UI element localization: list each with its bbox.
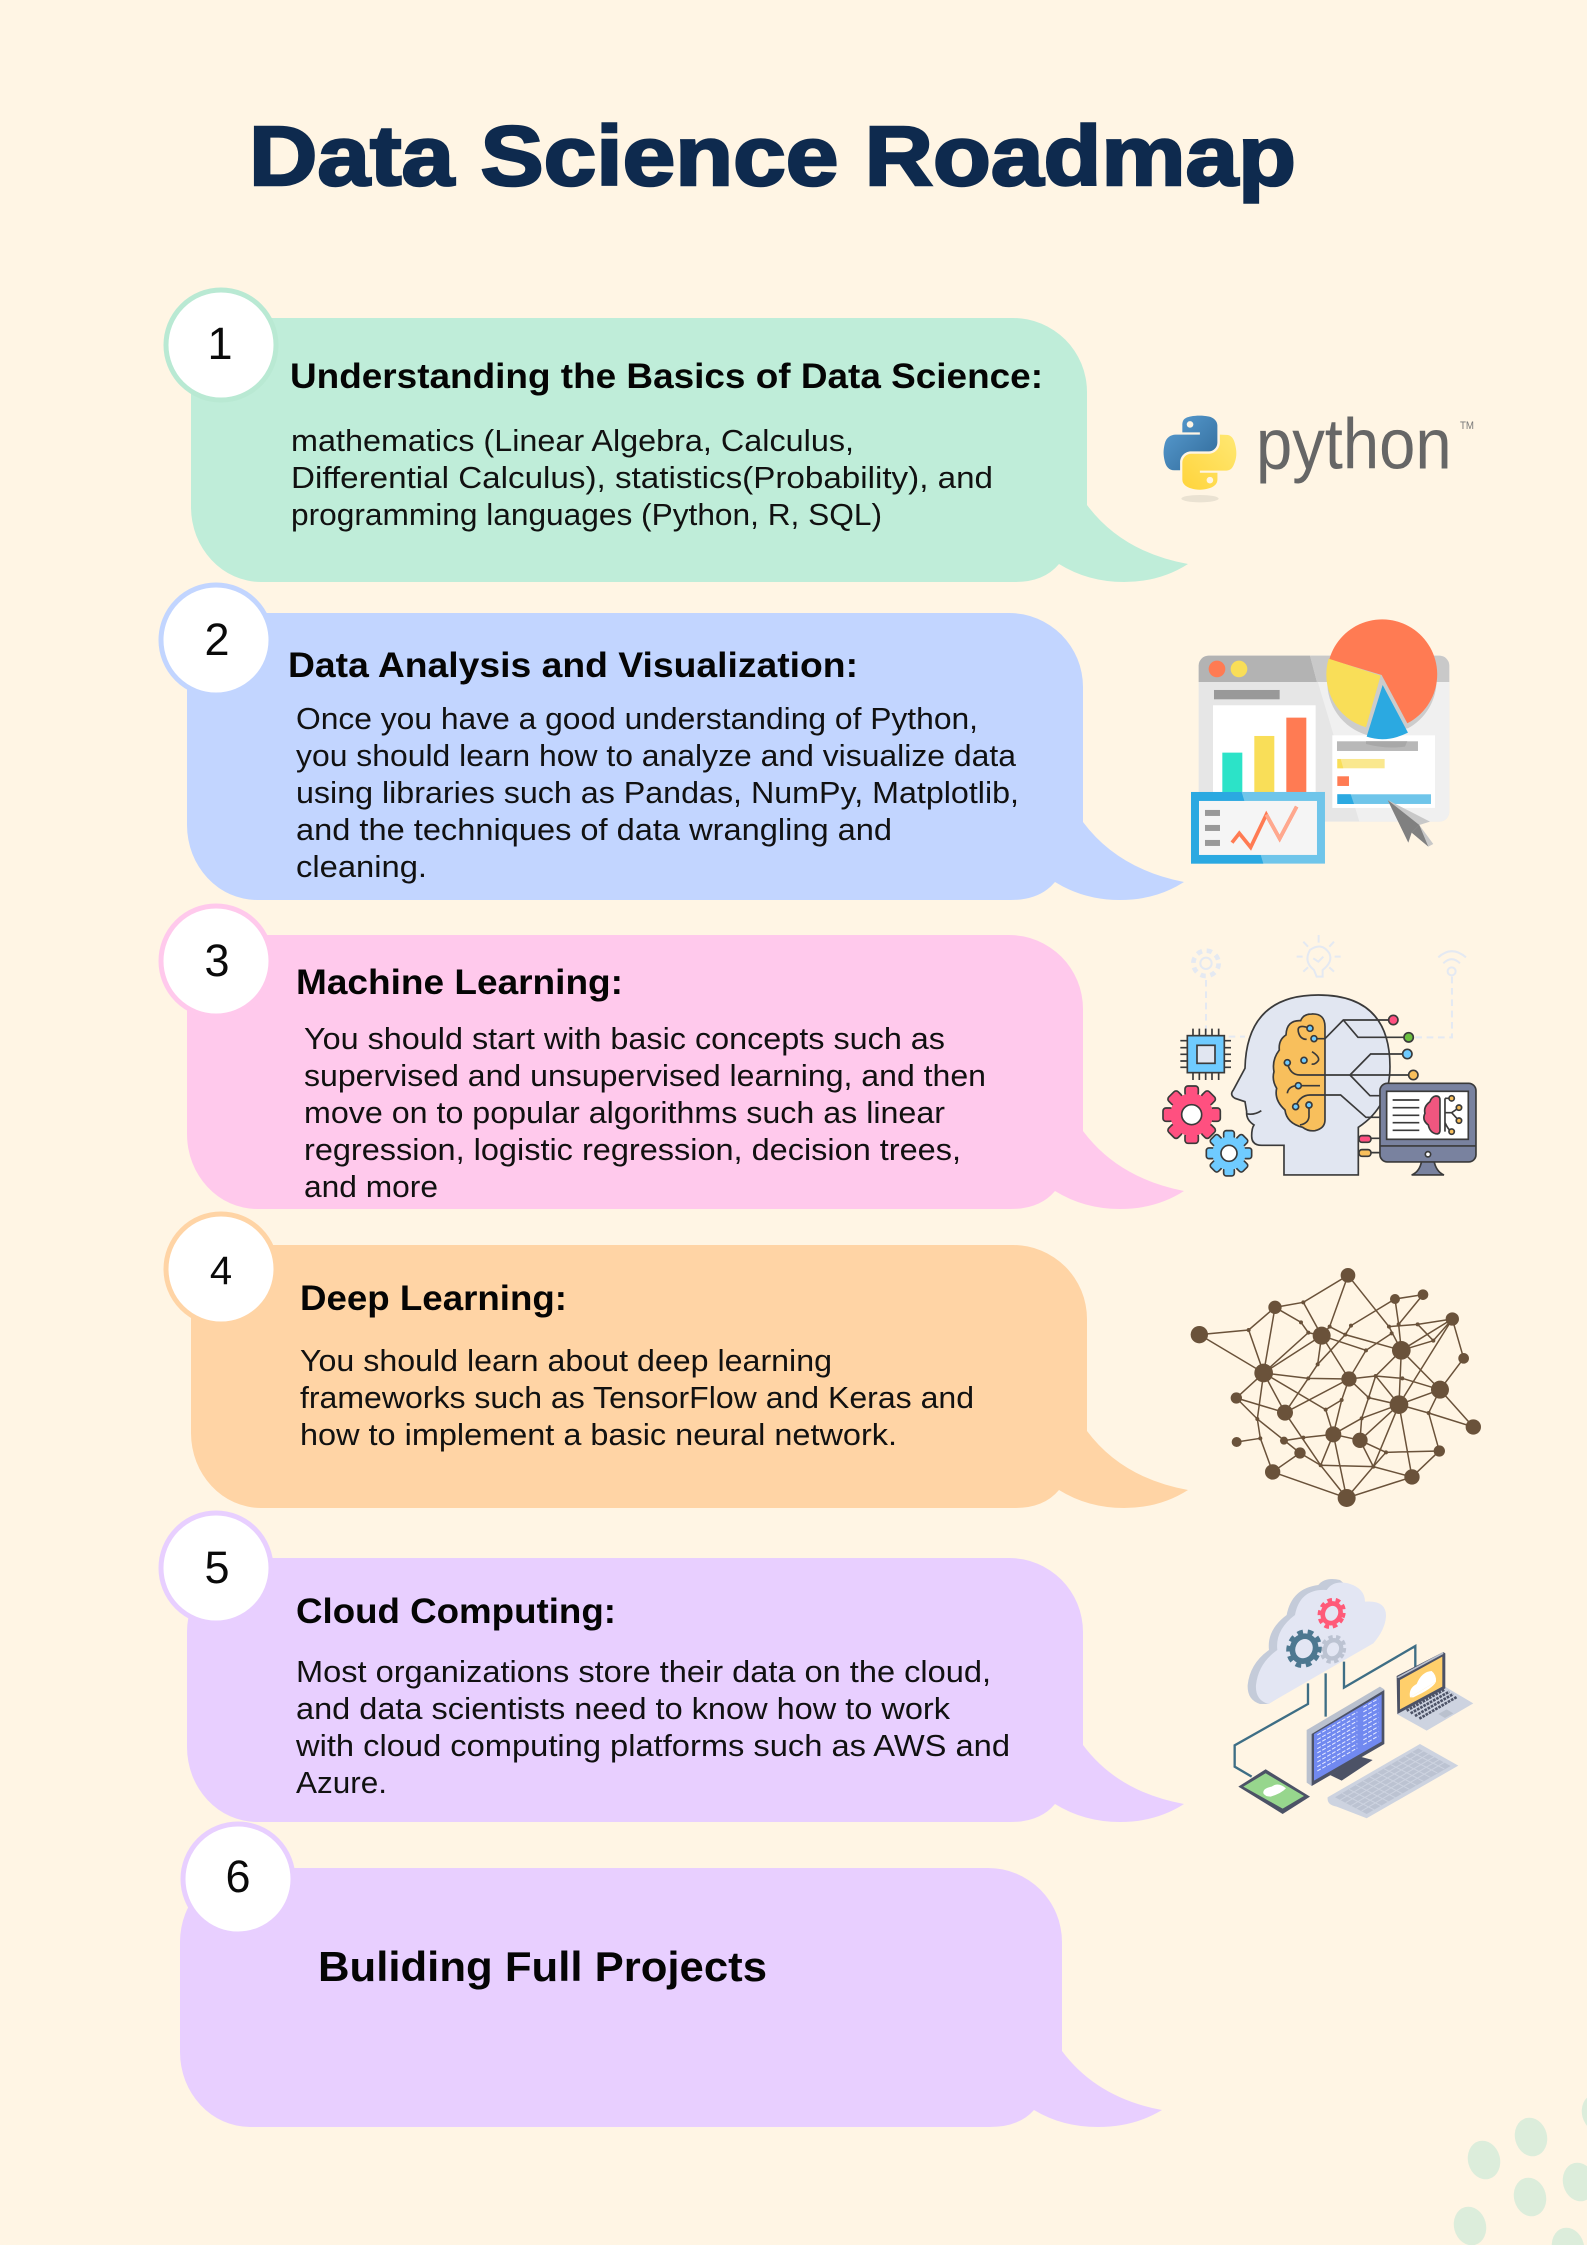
- heading: step 1: Understanding the Basics of Data Science:: [290, 357, 1043, 396]
- desktop monitor: [1307, 1687, 1384, 1786]
- heading: step 3: Machine Learning:: [296, 963, 623, 1002]
- text block: step 1: Differential Calculus), statistics(Probability), and: [291, 460, 993, 495]
- step number 4: 4: [210, 1249, 232, 1293]
- head: [1232, 995, 1390, 1175]
- blue gear: [1206, 1131, 1252, 1176]
- heading: step 5: Cloud Computing:: [296, 1592, 616, 1631]
- icon: python logo: python: [1256, 404, 1452, 484]
- monitor: [1380, 1083, 1476, 1175]
- step number 1: [166, 290, 276, 400]
- text block: step 4: how to implement a basic neural network.: [300, 1417, 897, 1452]
- connection wires: [1235, 1646, 1415, 1777]
- text block: step 4: [300, 1343, 974, 1452]
- text block: step 2: using libraries such as Pandas, NumPy, Matplotlib,: [296, 775, 1019, 810]
- text block: step 2: you should learn how to analyze and visualize data: [296, 738, 1017, 773]
- panel: step 2 data analysis: [161, 585, 1184, 900]
- tablet: [1238, 1769, 1310, 1814]
- chip: [1180, 1029, 1231, 1080]
- icon: data dashboard with charts: [1191, 619, 1449, 864]
- text block: step 3: regression, logistic regression, decision trees,: [304, 1132, 961, 1167]
- icon: python logo: [1164, 404, 1474, 502]
- keyboard: [1328, 1744, 1458, 1818]
- step number 1: 1: [207, 318, 233, 369]
- panel: step 6 full projects: [180, 1824, 1162, 2127]
- text block: step 2: and the techniques of data wrangling and: [296, 812, 892, 847]
- text block: step 5: [295, 1654, 1010, 1800]
- panel: step 4 deep learning: [166, 1214, 1188, 1508]
- cloud: [1248, 1579, 1386, 1704]
- icon: cloud computing devices: [1235, 1579, 1473, 1818]
- text block: step 2: [296, 701, 1019, 884]
- step number 5: [161, 1513, 271, 1623]
- text block: step 2: cleaning.: [296, 849, 427, 884]
- pink gear: [1163, 1086, 1220, 1143]
- step number 6: 6: [225, 1851, 251, 1902]
- panel: step 5 cloud computing: [161, 1513, 1184, 1822]
- step number 6: [183, 1824, 293, 1934]
- icon: neural network graph: [1191, 1268, 1481, 1507]
- icon: brain and machine learning: [1163, 935, 1476, 1176]
- icon: python logo: TM: [1460, 420, 1474, 432]
- step number 2: [161, 585, 271, 695]
- circuit wires: [1287, 1020, 1413, 1153]
- text block: step 3: and more: [304, 1169, 438, 1204]
- panel: step 3 machine learning: [161, 906, 1184, 1209]
- text block: step 2: Once you have a good understanding of Python,: [296, 701, 978, 736]
- faint background symbols: [1193, 935, 1466, 1037]
- step number 3: [161, 906, 271, 1016]
- brain: [1273, 1014, 1325, 1131]
- text block: step 5: and data scientists need to know how to work: [296, 1691, 951, 1726]
- step number 3: 3: [204, 935, 230, 986]
- heading: step 2: Data Analysis and Visualization:: [288, 646, 858, 685]
- text block: step 4: You should learn about deep learning: [300, 1343, 832, 1378]
- text block: step 3: [304, 1021, 986, 1204]
- laptop: [1397, 1652, 1473, 1731]
- title: Data Science Roadmap: [249, 109, 1296, 203]
- text block: step 3: supervised and unsupervised learning, and then: [304, 1058, 986, 1093]
- text block: step 5: Azure.: [296, 1765, 387, 1800]
- heading: step 4: Deep Learning:: [300, 1279, 567, 1318]
- text block: step 1: mathematics (Linear Algebra, Calculus,: [291, 423, 854, 458]
- text block: step 5: with cloud computing platforms such as AWS and: [295, 1728, 1010, 1763]
- text block: step 4: frameworks such as TensorFlow and Keras and: [300, 1380, 974, 1415]
- step number 2: 2: [204, 614, 230, 665]
- panel: step 1 basics: [166, 290, 1188, 582]
- step number 5: 5: [204, 1542, 230, 1593]
- heading: step 6: Buliding Full Projects: [318, 1943, 767, 1990]
- text block: step 3: move on to popular algorithms such as linear: [304, 1095, 945, 1130]
- text block: step 5: Most organizations store their data on the cloud,: [296, 1654, 991, 1689]
- step number 4: [166, 1214, 276, 1324]
- text block: step 1: programming languages (Python, R, SQL): [291, 497, 882, 532]
- decorative dots: bottom right: [1449, 2090, 1587, 2245]
- text block: step 1: [291, 423, 993, 532]
- text block: step 3: You should start with basic concepts such as: [304, 1021, 945, 1056]
